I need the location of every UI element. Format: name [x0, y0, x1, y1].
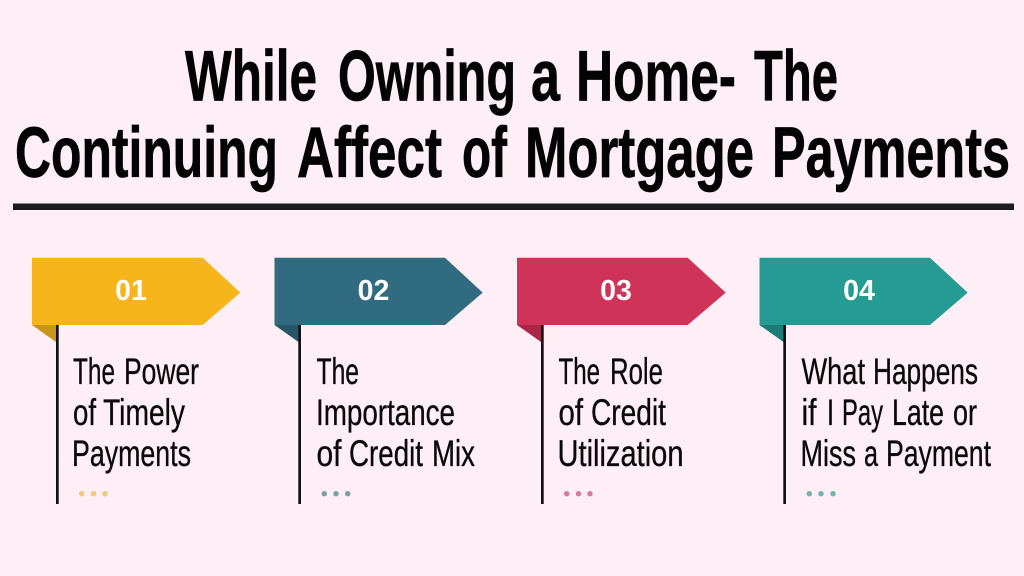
flag fold 01: [32, 325, 56, 342]
number 02: 02: [358, 275, 389, 307]
number 04: 04: [843, 275, 875, 307]
text block 02: Credit: [349, 433, 424, 474]
panel: step 02: [274, 258, 483, 504]
title: a: [531, 36, 561, 116]
text block 03: [558, 351, 684, 474]
text block 04: Happens: [873, 351, 978, 392]
title: Mortgage: [525, 113, 754, 193]
flag fold 04: [760, 325, 784, 342]
text block 02: Mix: [432, 433, 475, 474]
flag pole 04: [783, 325, 786, 504]
text block 01: The: [73, 351, 115, 392]
title: Owning: [338, 36, 516, 116]
title: While: [185, 36, 317, 116]
text block 04: What: [802, 351, 866, 392]
text block 02: [316, 351, 475, 474]
text block 04: Late: [892, 392, 944, 433]
text block 04: if: [802, 392, 817, 433]
flag banner 02: [274, 258, 483, 325]
text block 03: Credit: [591, 392, 667, 433]
flag fold 02: [274, 325, 298, 342]
flag banner 03: [517, 258, 726, 325]
flag pole 01: [56, 325, 59, 504]
title: Continuing: [15, 113, 278, 193]
dots 01: [79, 491, 108, 496]
text block 03: of: [558, 392, 584, 433]
flag fold 03: [517, 325, 541, 342]
number 01: 01: [115, 275, 147, 307]
title: of: [462, 113, 507, 193]
text block 01: Timely: [103, 392, 185, 433]
text block 02: of: [316, 433, 342, 474]
title: [15, 36, 1010, 193]
title: The: [754, 36, 838, 116]
panel: step 04: [760, 258, 992, 504]
text block 04: [800, 351, 992, 474]
dots 04: [807, 491, 836, 496]
text block 04: a: [864, 433, 878, 474]
dots 02: [322, 491, 350, 496]
text block 01: Payments: [72, 433, 191, 474]
text block 03: Role: [610, 351, 663, 392]
text block 01: [72, 351, 199, 474]
text block 04: or: [953, 392, 977, 433]
text block 04: I: [827, 392, 834, 433]
text block 02: The: [316, 351, 359, 392]
text block 03: The: [558, 351, 600, 392]
text block 04: Pay: [842, 392, 883, 433]
text block 04: Miss: [800, 433, 856, 474]
flag pole 03: [541, 325, 544, 504]
flag banner 04: [760, 258, 968, 325]
flag pole 02: [298, 325, 301, 504]
text block 01: Power: [124, 351, 199, 392]
title: Home-: [576, 36, 736, 116]
panel: step 01: [32, 258, 240, 504]
text block 01: of: [73, 392, 97, 433]
text block 03: Utilization: [558, 433, 684, 474]
dots 03: [564, 491, 593, 496]
title underline: [13, 204, 1014, 210]
text block 02: Importance: [316, 392, 455, 433]
panel: step 03: [517, 258, 726, 504]
number 03: 03: [600, 275, 632, 307]
flag banner 01: [32, 258, 240, 325]
title: Affect: [297, 113, 442, 193]
